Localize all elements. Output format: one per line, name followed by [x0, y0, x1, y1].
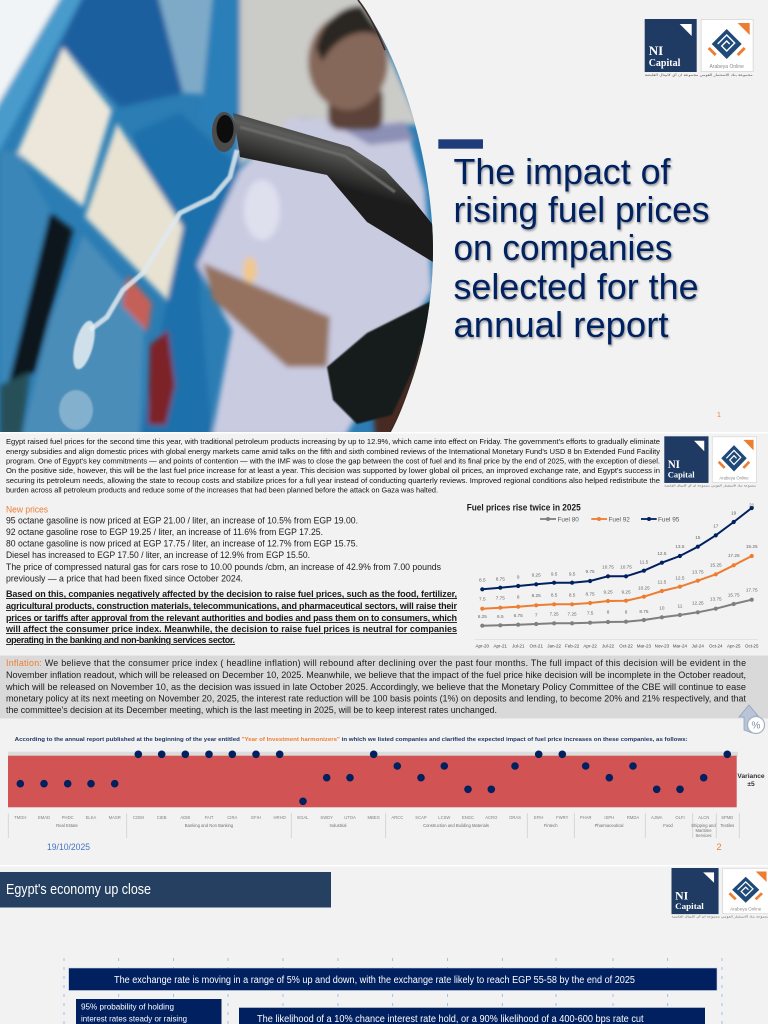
photo edge arcs — [358, 0, 421, 432]
data labels: Fuel 80: 7.5 — [587, 611, 594, 616]
inflation paragraph: the committee's decision at its December meeting, which is the last meeting in 2025, will be to keep interest rates unchanged. — [6, 705, 497, 715]
company tickers: ACRO — [485, 815, 498, 820]
new prices list: previously — a price that had been fixed since October 2024. — [6, 574, 243, 584]
sector labels — [56, 823, 734, 838]
annual report note: According to the annual report published at the beginning of the year entitled "Year of Investment harmonizers" in which we listed companies and clarified the expected impact of fuel price increases on these companies, as follows: — [15, 737, 688, 743]
inflation band background — [0, 656, 768, 718]
logos: NI Capital and Arabeya Online: Capital — [675, 901, 704, 911]
exchange rate bar: The exchange rate is moving in a range of 5% up and down, with the exchange rate likely to reach EGP 55-58 by the end of 2025 — [114, 975, 635, 986]
data labels: Fuel 95: 9.75 — [586, 569, 595, 574]
intro paragraph: program. One of Egypt's key commitments — and points of contention — with the IMF was to close the gap between the cost of fuel and its final price by the end of 2025, with the exception of diesel. — [6, 456, 660, 466]
company tickers: FWRY — [556, 815, 569, 820]
x-axis labels: Apr-20 — [476, 644, 490, 649]
title: annual report — [454, 304, 668, 345]
x-axis labels: Jul-22 — [602, 644, 615, 649]
company tickers: ISPH — [604, 815, 614, 820]
data labels: Fuel 80: 13.75 — [710, 597, 722, 602]
slide divider — [0, 432, 768, 434]
company tickers: MBEG — [368, 815, 380, 820]
title accent bar — [438, 139, 483, 149]
bold underlined conclusion — [5, 589, 457, 645]
sector labels: Food — [663, 823, 673, 828]
new prices list: 80 octane gasoline is now priced at EGP 17.75 / liter, an increase of 12.7% from EGP 15.75. — [6, 538, 358, 548]
company tickers: EMAD — [38, 815, 50, 820]
title: The impact of — [454, 151, 671, 192]
intro paragraph: securing its petroleum needs, allowing the state to recoup costs and stabilize prices for a full year instead of conducting quarterly reviews. Improved regional conditions also helped redistribute the — [6, 476, 660, 485]
series: Fuel 95 — [480, 506, 754, 591]
data labels: Fuel 95: 21 — [749, 503, 755, 508]
data labels: Fuel 95: 8.75 — [496, 577, 505, 582]
data labels: Fuel 95: 9.5 — [569, 571, 576, 576]
company tickers: ELKA — [86, 815, 97, 820]
data labels: Fuel 80: 10 — [659, 606, 665, 611]
data labels: Fuel 92: 12.5 — [675, 575, 685, 580]
data labels: Fuel 92: 15.25 — [710, 562, 722, 567]
data labels: Fuel 80 — [478, 588, 758, 619]
data labels: Fuel 92: 8.75 — [586, 591, 595, 596]
sector labels: Fintech — [544, 823, 558, 828]
bold underlined conclusion: agricultural products, construction materials, telecommunications, and pharmaceutical sectors, will raise their — [6, 601, 457, 611]
slide 1: cover — [0, 0, 753, 436]
company tickers: EGAL — [297, 815, 309, 820]
chart legend — [540, 516, 680, 523]
data labels: Fuel 92: 9.25 — [621, 589, 631, 594]
company tickers: ALCN — [698, 815, 709, 820]
company tickers: EFIH — [534, 815, 543, 820]
data labels: Fuel 92: 8.5 — [551, 592, 558, 597]
variance label: ±5 — [747, 781, 755, 788]
company tickers: ARCC — [391, 815, 403, 820]
logos: NI Capital and Arabeya Online: NI — [675, 890, 689, 902]
company dots — [16, 750, 731, 805]
company tickers: COMI — [133, 815, 144, 820]
x-axis labels: Mar-24 — [673, 644, 688, 649]
logos: NI Capital and Arabeya Online — [672, 868, 768, 919]
bold underlined conclusion: Based on this, companies negatively affected by the decision to raise fuel prices, such as the food, fertilizer, — [6, 589, 457, 599]
data labels: Fuel 92: 13.75 — [692, 569, 704, 574]
new prices list: Diesel has increased to EGP 17.50 / liter, an increase of 12.9% from EGP 15.50. — [6, 550, 310, 560]
logos: NI Capital and Arabeya Online: مجموعة بنك الاستثمار القومي مجموعة ان آي كابيتال القابضة — [645, 73, 753, 77]
intro paragraph: burden across all petroleum products and reduce some of the increases that had been planned before the attack on Gaza was halted. — [6, 486, 438, 494]
data labels: Fuel 80: 6.5 — [497, 614, 504, 619]
bold underlined conclusion: will affect the consumer price index. Meanwhile, the decision to raise fuel prices is neutral for companies — [5, 624, 457, 634]
x-axis labels: Apr-22 — [583, 644, 597, 649]
company tickers: TMGH — [14, 815, 26, 820]
data labels: Fuel 80: 8.75 — [639, 609, 649, 614]
data labels: Fuel 80: 7.25 — [550, 611, 559, 616]
data labels: Fuel 95: 9 — [517, 574, 520, 579]
x-axis labels: Oct-22 — [619, 644, 633, 649]
data labels: Fuel 95: 12.5 — [657, 551, 667, 556]
x-axis labels: Apr-21 — [494, 644, 508, 649]
title: rising fuel prices — [454, 189, 710, 230]
data labels: Fuel 95: 19 — [731, 511, 737, 516]
inflation paragraph: Inflation: We believe that the consumer price index ( headline inflation) will rebound after declining over the past four months. The full impact of this decision will be evident in the — [6, 658, 746, 668]
title: selected for the — [454, 266, 698, 307]
data labels: Fuel 80: 17.75 — [746, 588, 758, 593]
new prices list — [6, 516, 442, 584]
company tickers: OLFI — [675, 815, 685, 820]
company tickers: CIEB — [157, 815, 167, 820]
logos: NI Capital and Arabeya Online: مجموعة بنك الاستثمار القومي مجموعة ان آي كابيتال القابضة — [672, 915, 768, 919]
data labels: Fuel 92: 17.25 — [728, 553, 740, 558]
sector labels: Pharmaceutical — [595, 823, 623, 828]
intro paragraph: Egypt raised fuel prices for the second time this year, with traditional petroleum products increasing by up to 12.9%, which came into effect on Friday. The government's efforts to gradually eliminate — [6, 437, 660, 446]
new prices heading: New prices — [6, 504, 48, 514]
line chart: fuel prices — [467, 503, 759, 649]
axis line — [475, 639, 758, 641]
chart legend: Fuel 95 — [658, 516, 680, 523]
bold underlined conclusion: operating in the banking and non-banking services sector. — [6, 635, 235, 645]
logos: NI Capital and Arabeya Online: Arabeya Online — [719, 475, 749, 480]
company tickers: ORAS — [509, 815, 521, 820]
company tickers: RMDA — [627, 815, 639, 820]
sector labels: Construction and Building Materials — [423, 823, 489, 828]
data labels: Fuel 80: 8 — [607, 610, 610, 615]
header banner: Egypt's economy up close — [6, 881, 151, 898]
x-axis labels: Oct-25 — [745, 644, 759, 649]
company tickers: UTOA — [344, 815, 356, 820]
sector labels: Textiles — [720, 823, 734, 828]
x-axis labels: Apr-25 — [727, 644, 741, 649]
probability box: holding rates: 95% probability of holding — [81, 1002, 174, 1012]
company tickers: CIRA — [227, 815, 238, 820]
title: on companies — [454, 227, 672, 268]
x-axis labels: Oct-21 — [529, 644, 543, 649]
data labels: Fuel 92: 8 — [517, 595, 520, 600]
x-axis labels: Mar-23 — [637, 644, 652, 649]
chart legend: Fuel 80 — [558, 516, 579, 523]
variance band chart — [8, 750, 765, 838]
chart legend: Fuel 92 — [608, 516, 630, 523]
x-axis labels: Oct-24 — [709, 644, 723, 649]
probability box: rate cut — [239, 1008, 705, 1024]
sector separators — [8, 813, 739, 838]
sector labels: Real Estate — [56, 823, 78, 828]
data labels: Fuel 95: 17 — [713, 524, 719, 529]
icon: percent arrow — [739, 705, 764, 734]
slide 2: fuel price analysis — [0, 436, 768, 853]
data labels: Fuel 80: 11 — [677, 604, 683, 609]
new prices list: 92 octane gasoline rose to EGP 19.25 / liter, an increase of 11.6% from EGP 17.25. — [6, 527, 323, 537]
data labels: Fuel 80: 6.75 — [514, 613, 523, 618]
x-axis labels — [476, 644, 759, 649]
sector labels: Industrial — [330, 823, 347, 828]
sector labels: Services — [695, 833, 712, 838]
x-axis labels: Jan-22 — [547, 644, 561, 649]
company tickers: SWDY — [320, 815, 333, 820]
slide 3: economy up close — [0, 868, 768, 1024]
red variance band — [8, 756, 737, 807]
company tickers: ENGC — [462, 815, 474, 820]
page number 2: 2 — [716, 842, 722, 852]
company tickers: LCSW — [438, 815, 450, 820]
data labels: Fuel 92: 7.5 — [479, 597, 486, 602]
variance label: Variance — [737, 773, 765, 780]
series: Fuel 92 — [480, 554, 754, 611]
data labels: Fuel 80: 8 — [625, 610, 628, 615]
company tickers: HRHO — [274, 815, 287, 820]
logos: NI Capital and Arabeya Online — [664, 436, 757, 487]
data labels: Fuel 92: 10.25 — [638, 585, 650, 590]
data labels: Fuel 80: 7.25 — [568, 611, 577, 616]
new prices list: The price of compressed natural gas for cars rose to 10.00 pounds /cbm, an increase of 42.9% from 7.00 pounds — [6, 562, 442, 572]
probability box: holding rates: interest rates steady or raising — [81, 1014, 187, 1024]
company tickers: ADIB — [180, 815, 190, 820]
x-axis labels: Nov-23 — [655, 644, 670, 649]
data labels: Fuel 80: 15.75 — [728, 593, 740, 598]
inflation paragraph: monetary policy at its next meeting on November 20, 2025, the interest rate reduction will be 100 basis points (1%) on deposits and lending, to become 20% and 21% respectively, and that — [6, 694, 747, 704]
intro paragraph: energy subsidies and align domestic prices with global energy markets came amid talks on the fifth and sixth combined reviews of the International Monetary Fund's USD 8 bn Extended Fund Facility — [6, 447, 660, 456]
x-axis labels: Feb-22 — [565, 644, 580, 649]
data labels: Fuel 95: 10.75 — [602, 564, 614, 569]
logos: NI Capital and Arabeya Online: NI — [649, 43, 663, 58]
logos: NI Capital and Arabeya Online — [645, 19, 753, 77]
chart title: Fuel prices rise twice in 2025 — [467, 503, 581, 513]
logos: NI Capital and Arabeya Online: مجموعة بنك الاستثمار القومي مجموعة ان آي كابيتال القابضة — [664, 483, 757, 487]
slide divider — [0, 865, 768, 866]
company tickers: PHAR — [580, 815, 592, 820]
data labels: Fuel 92: 8.25 — [532, 593, 541, 598]
date: 19/10/2025 — [47, 842, 90, 853]
new prices list: 95 octane gasoline is now priced at EGP 21.00 / liter, an increase of 10.5% from EGP 19.00. — [6, 516, 358, 526]
exchange rate bar — [69, 968, 717, 990]
logos: NI Capital and Arabeya Online: Arabeya Online — [730, 907, 762, 912]
company tickers: PHDC — [62, 815, 74, 820]
photo: fuel nozzle held by attendant — [0, 0, 440, 436]
data labels: Fuel 80: 6.25 — [478, 614, 487, 619]
x-axis labels: Jul-24 — [692, 644, 704, 649]
inflation paragraph: which will be released on November 10, as the decision was issued in late October 2025. Accordingly, we believe that the Monetary Policy Committee of the CBE will continue to ease — [5, 682, 746, 692]
data labels: Fuel 92: 19.25 — [746, 544, 758, 549]
title — [454, 151, 710, 345]
data labels: Fuel 95 — [479, 503, 755, 582]
series: Fuel 80 — [480, 598, 754, 628]
data labels: Fuel 95: 13.5 — [675, 544, 685, 549]
company tickers: AJWA — [651, 815, 663, 820]
data labels: Fuel 92: 8.5 — [569, 592, 576, 597]
intro paragraph — [6, 437, 660, 494]
top grey strip — [8, 752, 738, 757]
logos: NI Capital and Arabeya Online: Arabeya Online — [709, 64, 744, 70]
logos: NI Capital and Arabeya Online: Capital — [668, 470, 695, 480]
variance label — [737, 773, 765, 788]
sector labels: Maritime — [695, 828, 712, 833]
logos: NI Capital and Arabeya Online: NI — [668, 459, 680, 471]
company tickers: MASR — [109, 815, 121, 820]
data labels: Fuel 95: 8.5 — [479, 577, 486, 582]
data labels: Fuel 92 — [479, 544, 758, 602]
page number 1: 1 — [717, 412, 721, 419]
fuel splash — [59, 150, 237, 430]
logos: NI Capital and Arabeya Online: Capital — [649, 58, 681, 69]
data labels: Fuel 95: 10.75 — [620, 564, 632, 569]
icon: percent arrow: % — [752, 720, 761, 732]
sector labels: Banking and Non Banking — [185, 823, 234, 828]
inflation paragraph: November inflation readout, which will be released on December 10, 2025. Meanwhile, we believe that the impact of the fuel price hike decision will be incomplete in the October readout, — [6, 670, 746, 680]
data labels: Fuel 80: 7 — [535, 613, 538, 618]
data labels: Fuel 92: 11.5 — [658, 579, 667, 584]
x-axis labels: Jul-21 — [512, 644, 525, 649]
company tickers: EFIH — [251, 815, 261, 820]
nozzle — [212, 112, 433, 424]
company tickers — [14, 815, 733, 820]
header banner — [0, 872, 331, 908]
sector labels: Shipping and — [691, 823, 716, 828]
data labels: Fuel 92: 7.75 — [496, 596, 505, 601]
data labels: Fuel 92: 9.25 — [603, 589, 613, 594]
data labels: Fuel 95: 9.5 — [551, 571, 558, 576]
data labels: Fuel 80: 12.25 — [692, 601, 704, 606]
data labels: Fuel 95: 11.5 — [640, 559, 649, 564]
intro paragraph: On the positive side, however, this will be the last fuel price increase for at least a year. This decision was supported by lower global oil prices, an improved exchange rate, and Egypt's success in — [6, 466, 660, 475]
company tickers: FAIT — [205, 815, 214, 820]
bold underlined conclusion: prices or tariffs after approval from the relevant authorities and bodies and pass them on to consumers, which — [6, 613, 457, 623]
company tickers: SCAP — [415, 815, 427, 820]
inflation paragraph — [5, 658, 747, 715]
data labels: Fuel 95: 15 — [695, 535, 701, 540]
probability box: holding rates — [76, 999, 222, 1024]
company tickers: SPMD — [721, 815, 733, 820]
data labels: Fuel 95: 9.25 — [532, 572, 541, 577]
